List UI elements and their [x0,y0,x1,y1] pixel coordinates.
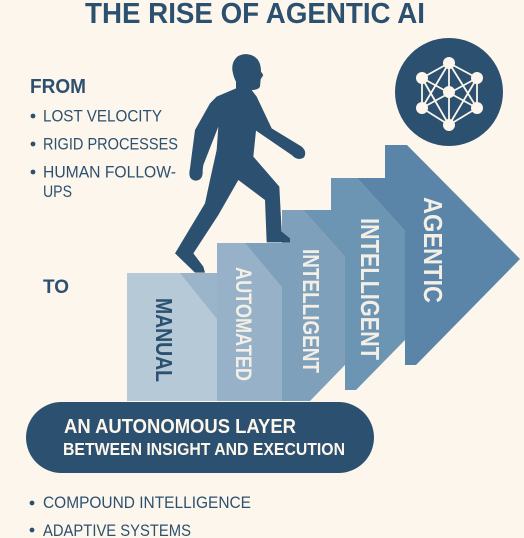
panel: to list [30,493,251,538]
callout: autonomous layer pill: AN AUTONOMOUS LAYER [64,416,297,438]
step: agentic: AGENTIC [418,197,448,303]
bullet: lost velocity: LOST VELOCITY [43,106,162,126]
icon: walking person [175,54,305,273]
step: intelligent upper: INTELLIGENT [355,218,385,360]
bullet: human follow-ups: HUMAN FOLLOW- [43,162,176,182]
bullet: human follow-ups [31,162,176,201]
heading: from: FROM [30,76,86,98]
icon: network hexagon [395,38,503,146]
step: manual [127,273,217,401]
step: automated: AUTOMATED [231,267,256,381]
bullet: human follow-ups: UPS [43,182,72,201]
callout: autonomous layer pill [26,402,374,473]
chart: ascending arrow steps [127,145,520,401]
heading: to: TO [43,277,69,298]
callout: autonomous layer pill: BETWEEN INSIGHT AND EXECUTION [63,439,345,459]
step: manual: MANUAL [151,298,177,382]
bullet: compound intelligence: COMPOUND INTELLIGENCE [43,493,251,512]
step: intelligent lower: INTELLIGENT [298,249,324,373]
step: intelligent upper [331,178,405,390]
step: intelligent lower [282,210,345,401]
panel: from list [30,76,178,201]
step: agentic [385,145,520,365]
step: automated [217,243,282,401]
bullet: rigid processes: RIGID PROCESSES [43,134,178,154]
